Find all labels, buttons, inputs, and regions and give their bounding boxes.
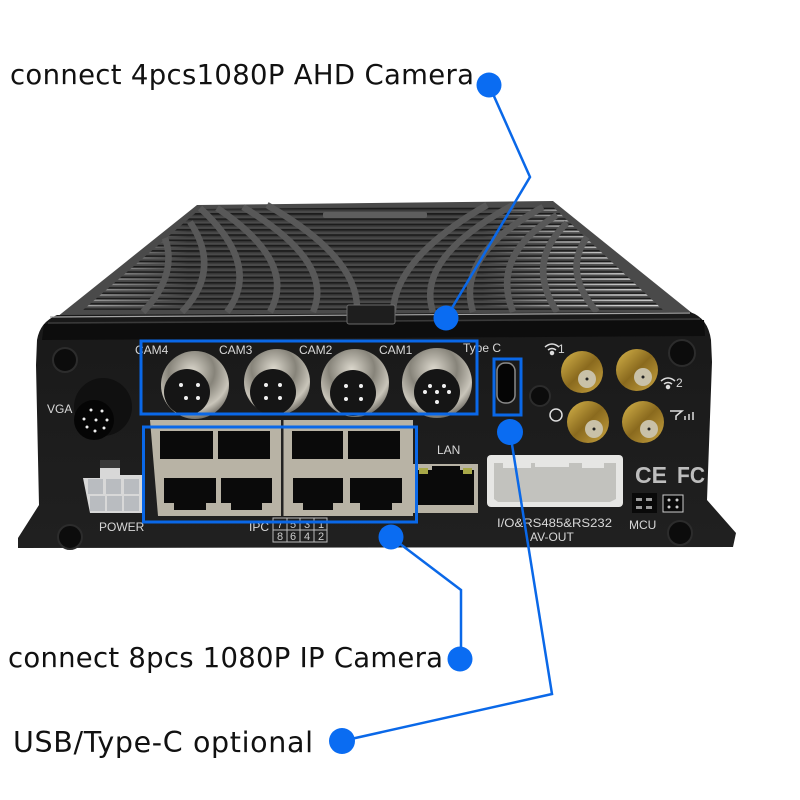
camera connectors: [161, 348, 472, 419]
infographic canvas: [10, 64, 736, 758]
label: AHD cameras: connect 4pcs1080P AHD Camera: [10, 59, 474, 91]
port labels: POWER: [99, 520, 145, 534]
callout: USB or Type-C: [13, 359, 552, 759]
port labels: [99, 341, 683, 544]
highlight box: Type-C port: [494, 359, 521, 415]
device top cover with vents: [57, 201, 700, 317]
callout: 4 AHD cameras: [10, 59, 530, 414]
power connector: [83, 460, 142, 513]
IPC channel number grid: 5: [290, 519, 296, 531]
screws: [53, 340, 695, 549]
label: USB Type-C optional: USB/Type-C optional: [13, 726, 313, 759]
port labels: 1: [558, 342, 565, 356]
leader line: CAM ports: [446, 85, 530, 318]
CE and FC certification marks: CE: [635, 462, 667, 488]
CE and FC certification marks: [635, 462, 705, 488]
device photo: [18, 201, 736, 549]
dot: label end: [329, 728, 355, 754]
IPC channel number grid: 3: [304, 519, 310, 531]
lid clip tab: [347, 305, 395, 324]
IPC channel number grid: 1: [318, 519, 324, 531]
dot: device end: [434, 306, 458, 330]
port labels: IPC: [249, 520, 269, 534]
dot: label end: [448, 646, 472, 672]
antenna icons: [545, 344, 693, 421]
RJ45 camera ports panel: [150, 420, 413, 516]
white multi-pin connector: [487, 455, 623, 507]
dot: device end: [378, 524, 404, 550]
port labels: Type C: [463, 341, 501, 355]
IPC channel number grid: 4: [304, 531, 310, 543]
port labels: I/O&RS485&RS232: [497, 516, 612, 530]
IPC channel number grid: 8: [277, 531, 283, 543]
port labels: LAN: [437, 443, 460, 457]
LAN port: [413, 464, 478, 513]
port labels: MCU: [629, 518, 656, 532]
IPC channel number grid: [273, 518, 327, 543]
USB Type-C port: [497, 363, 515, 403]
VGA label: VGA: [47, 402, 72, 416]
port labels: CAM4: [135, 343, 169, 357]
leader line: IPC ports: [391, 537, 461, 659]
SMA antenna connectors: [561, 349, 664, 443]
port labels: CAM2: [299, 343, 333, 357]
highlight box: CAM ports: [141, 341, 477, 414]
port labels: CAM1: [379, 343, 413, 357]
port labels: AV-OUT: [530, 530, 574, 544]
MCU switches: [632, 493, 683, 513]
port labels: 2: [676, 376, 683, 390]
port labels: CAM3: [219, 343, 253, 357]
highlight box: IPC ports: [144, 427, 416, 522]
dot: device end: [497, 419, 523, 445]
IPC channel number grid: 2: [318, 531, 324, 543]
label: IP cameras: connect 8pcs 1080P IP Camera: [8, 642, 443, 674]
callout: 8 IP cameras: [8, 427, 472, 674]
IPC channel number grid: 6: [290, 531, 296, 543]
VGA port: [74, 378, 132, 440]
device body and flanges: [18, 305, 736, 548]
dot: label end: [476, 72, 502, 98]
IPC channel number grid: 7: [277, 519, 283, 531]
leader line: Type-C port: [342, 432, 552, 741]
CE and FC certification marks: FC: [677, 462, 705, 488]
